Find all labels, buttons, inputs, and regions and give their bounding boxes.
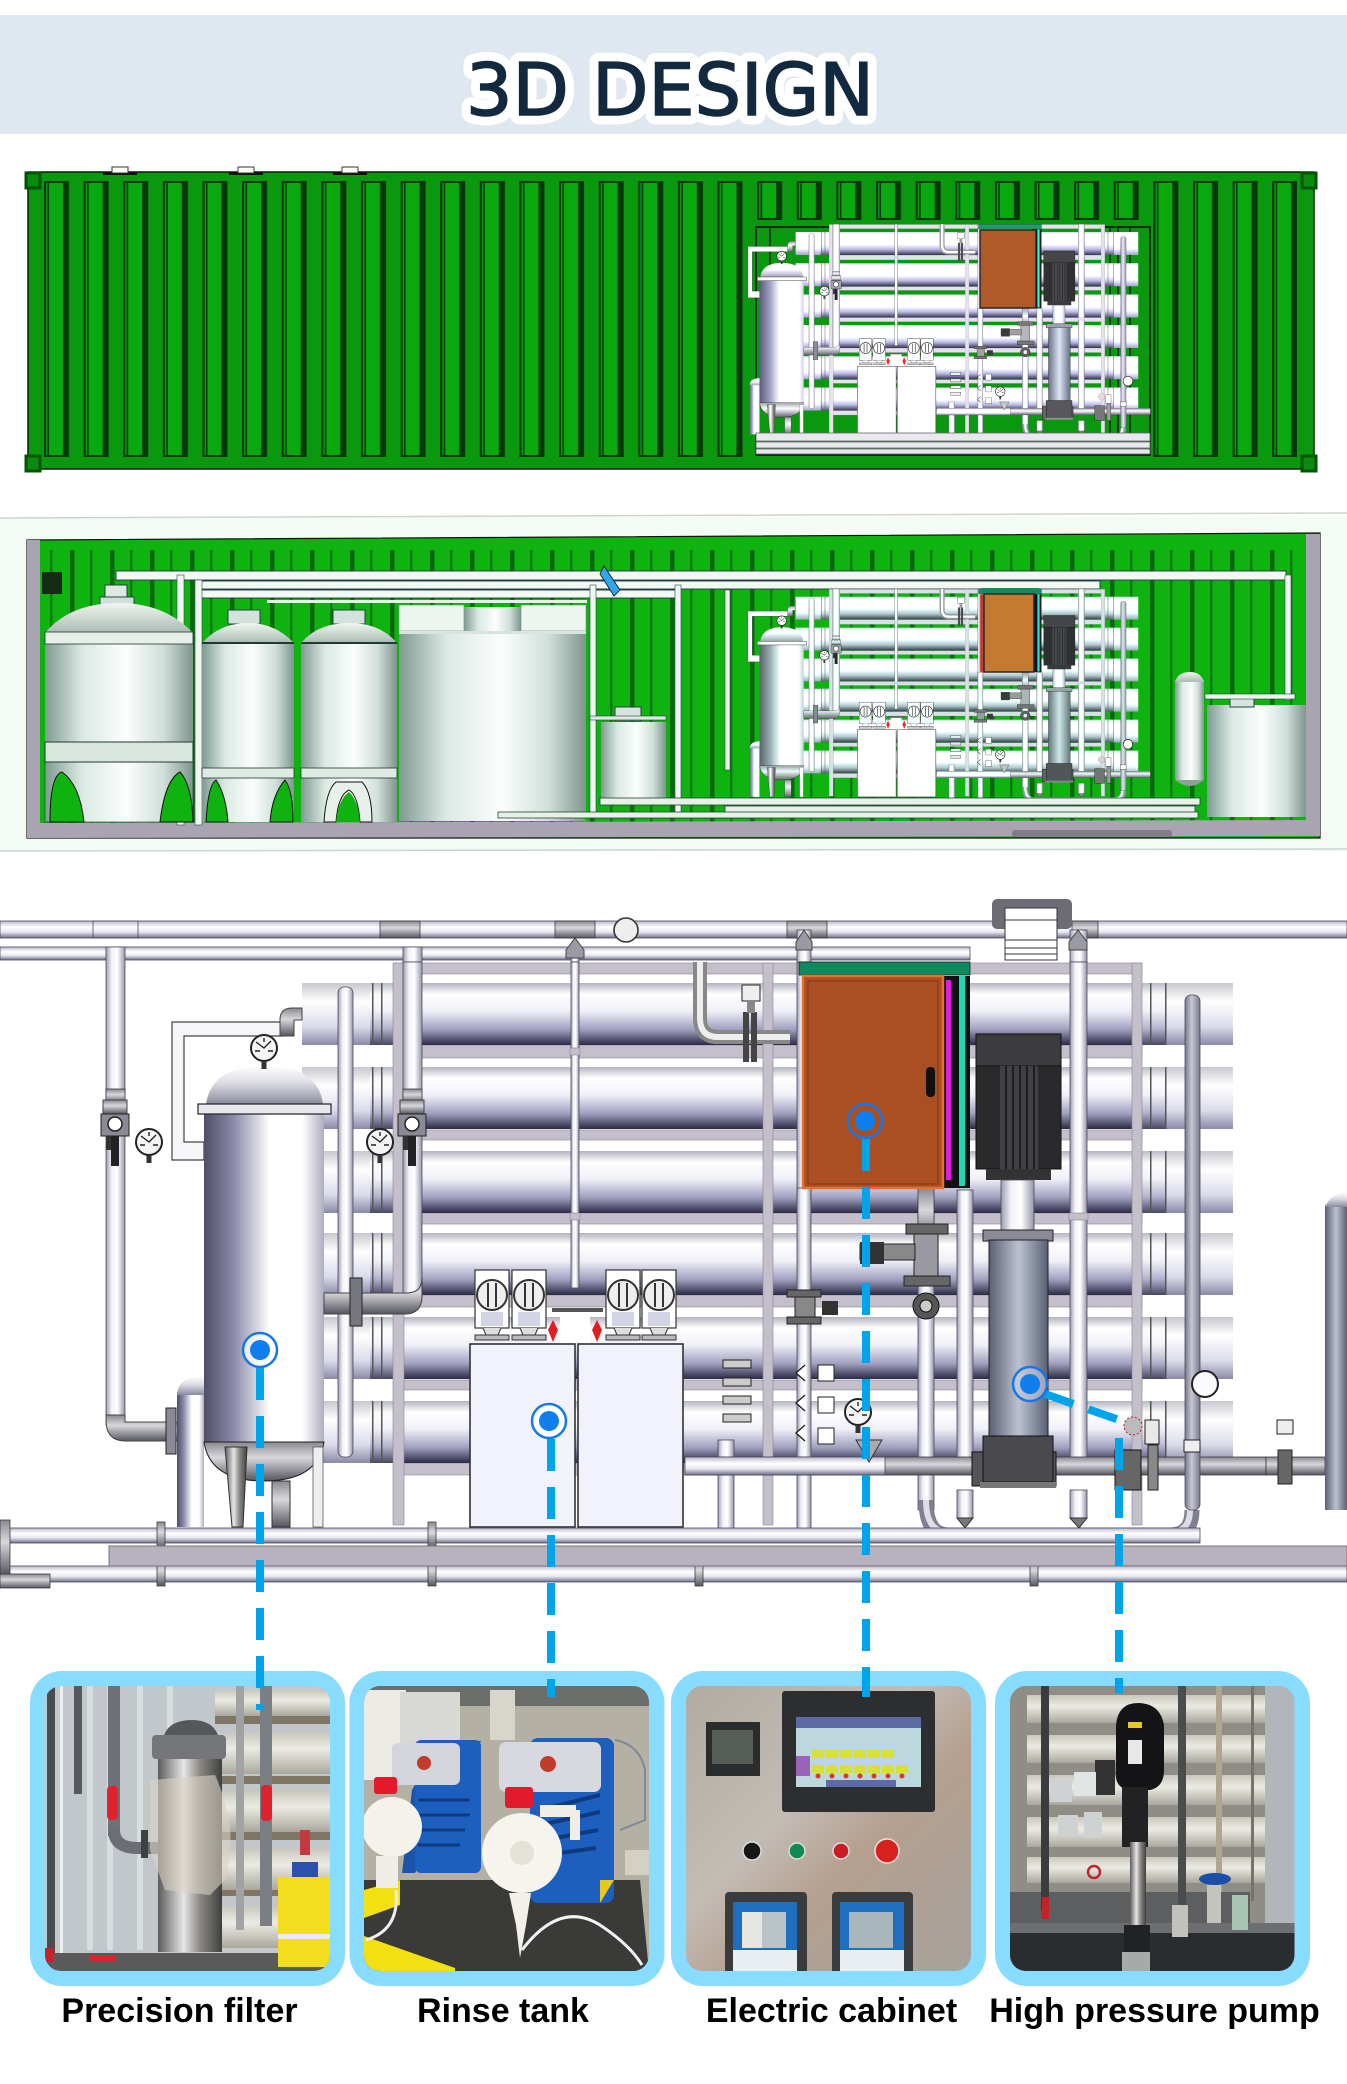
label: rinse tank: Rinse tank <box>417 1992 589 2030</box>
label: high pressure pump: High pressure pump <box>989 1992 1320 2030</box>
discharge pipe <box>1266 1457 1325 1475</box>
dosing tank <box>590 707 666 798</box>
window background ribs <box>770 228 1130 440</box>
lower pipes <box>0 1520 1347 1588</box>
pump photo <box>362 1686 649 1971</box>
right tank <box>1205 694 1306 817</box>
RO skid with filter, dosing tanks, cabinet, pump <box>172 962 1266 1535</box>
top pipes <box>116 566 1291 825</box>
floor slot <box>1012 830 1172 837</box>
label: precision filter: Precision filter <box>61 1992 298 2030</box>
pump photo <box>1010 1686 1295 1971</box>
RO skid inside container <box>748 224 1150 437</box>
marker: dosing tank <box>532 1404 566 1438</box>
photo panel: precision filter <box>30 1671 345 1986</box>
header band <box>0 15 1347 134</box>
title: 3D DESIGN <box>466 48 874 132</box>
leader line: rinse tank <box>547 1439 555 1697</box>
RO skid inside container <box>748 589 1150 800</box>
gauge <box>136 1129 162 1163</box>
photo panel: dosing pumps <box>350 1671 664 1986</box>
panel: container interior view <box>0 513 1347 851</box>
filter photo <box>45 1686 330 1971</box>
skid base rails <box>756 433 1150 454</box>
photo panel: electric cabinet <box>671 1671 986 1986</box>
panel: RO skid detail view <box>0 899 1347 1588</box>
high pressure skid hood <box>992 899 1072 960</box>
adjacent vessel <box>1325 1192 1347 1510</box>
electric cabinet <box>981 588 1039 672</box>
green wall <box>27 533 1320 838</box>
panel: container exterior view <box>26 167 1316 471</box>
corrugated side wall <box>44 181 1297 457</box>
left inlet pipe <box>101 947 204 1454</box>
tank B <box>202 610 294 822</box>
roof lifting lugs <box>103 167 367 175</box>
photo panel: high pressure pump <box>995 1671 1310 1986</box>
window frame <box>756 227 1150 455</box>
title: 3D DESIGN <box>466 48 874 132</box>
marker: cabinet <box>848 1104 882 1138</box>
container frame <box>27 534 1320 838</box>
marker: filter <box>243 1333 277 1367</box>
skid base rails <box>498 798 1200 818</box>
leader line: precision filter <box>256 1368 264 1710</box>
label: electric cabinet: Electric cabinet <box>706 1992 957 2030</box>
slim vessel <box>1175 672 1204 786</box>
top pipes <box>0 918 1347 962</box>
cabinet photo <box>686 1686 971 1977</box>
electric cabinet <box>980 230 1036 308</box>
leader line: high pressure pump <box>1045 1394 1122 1693</box>
tank A <box>45 585 193 822</box>
tank C <box>301 610 397 822</box>
leader line: electric cabinet <box>862 1139 870 1697</box>
corner castings <box>26 173 1316 471</box>
large storage tank <box>399 605 586 821</box>
wall vent <box>42 572 62 594</box>
flow meter <box>1277 1420 1293 1484</box>
marker: pump <box>1013 1367 1047 1401</box>
